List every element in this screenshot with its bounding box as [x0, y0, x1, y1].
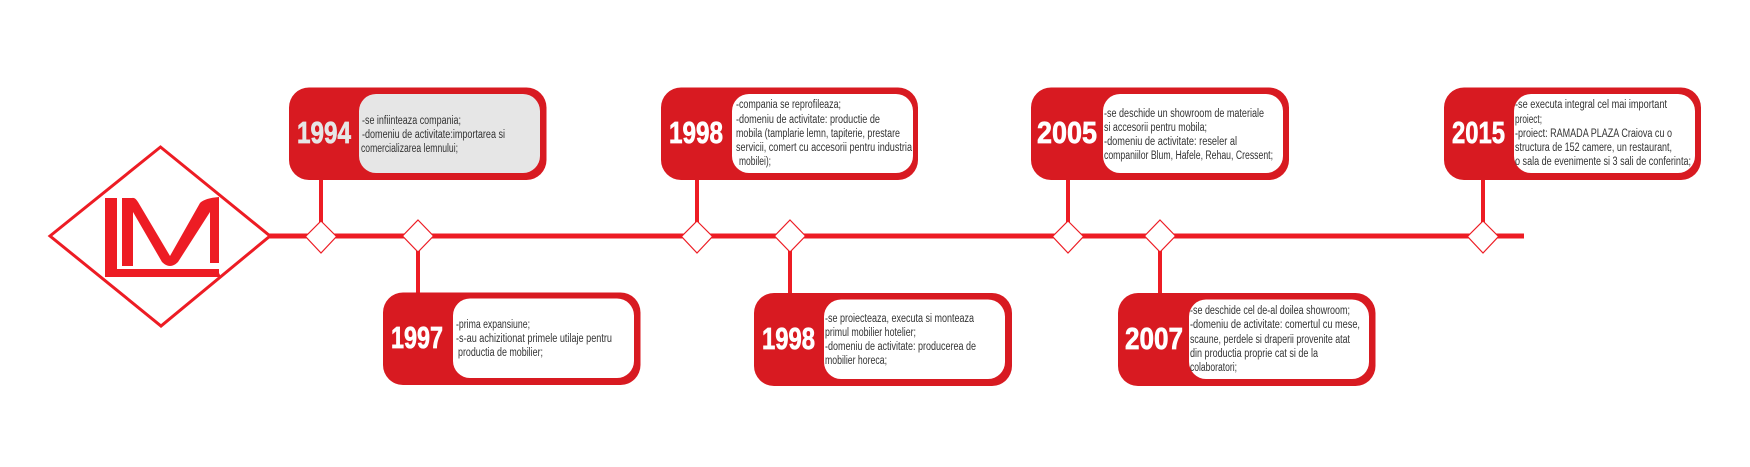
panel: 2015 [1444, 88, 1701, 180]
connector 1994 [319, 180, 323, 222]
marker 2007 [1144, 220, 1176, 252]
panel: 1998 top: mobilei); [739, 156, 771, 168]
marker 2005 [1052, 221, 1084, 253]
panel: 1997 [383, 292, 640, 385]
marker 1998 top [682, 221, 712, 253]
panel: 1998 bottom: primul mobilier hotelier; [825, 327, 916, 339]
marker 1997 [402, 220, 434, 252]
logo: LM in diamond [50, 147, 270, 326]
panel: 1994: comercializarea lemnului; [361, 143, 458, 155]
panel: 1997: -prima expansiune; [456, 319, 530, 331]
panel: 1997: -s-au achizitionat primele utilaje pentru [456, 333, 612, 345]
panel: 1998 bottom: mobilier horeca; [825, 355, 887, 367]
panel: 1998 bottom: 1998 [762, 321, 815, 356]
panel: 2005: 2005 [1037, 115, 1097, 150]
panel: 1997: productia de mobilier; [458, 347, 543, 359]
panel: 2007: 2007 [1125, 321, 1183, 356]
connector 2005 [1066, 180, 1070, 222]
panel: 2007: colaboratori; [1190, 362, 1237, 374]
panel: 1998 top: 1998 [669, 115, 723, 150]
panel: 1998 top: -compania se reprofileaza; [736, 99, 841, 111]
panel: 2005: -domeniu de activitate: reseler al [1104, 136, 1237, 148]
marker 2015 [1468, 221, 1498, 253]
panel: 2007: -se deschide cel de-al doilea showroom; [1190, 305, 1350, 317]
panel: 1994 [289, 88, 546, 180]
panel: 1998 top: mobila (tamplarie lemn, tapiterie, prestare [736, 128, 900, 140]
connector 1998 top [695, 180, 699, 222]
connector 1998 bottom [788, 251, 792, 293]
panel: 1998 top: servicii, comert cu accesorii pentru industria [736, 142, 912, 154]
panel: 1998 bottom [754, 293, 1012, 386]
panel: 2005: companiilor Blum, Hafele, Rehau, Cressent; [1104, 150, 1273, 162]
panel: 2005: si accesorii pentru mobila; [1104, 122, 1207, 134]
panel: 2015: proiect; [1515, 114, 1542, 126]
panel: 2007: din productia proprie cat si de la [1190, 348, 1318, 360]
panel: 2007 [1118, 293, 1376, 386]
panel: 2007: scaune, perdele si draperii provenite atat [1190, 334, 1351, 346]
panel: 2015: 2015 [1452, 115, 1505, 150]
marker 1998 bottom [774, 220, 806, 252]
connector 2015 [1481, 180, 1485, 222]
connector 2007 [1158, 251, 1162, 293]
panel: 1994: -se infiinteaza compania; [362, 115, 461, 127]
panel: 1998 top: -domeniu de activitate: productie de [736, 114, 880, 126]
timeline axis [268, 234, 1524, 238]
panel: 2015: o sala de evenimente si 3 sali de conferinta; [1515, 156, 1691, 168]
panel: 2015: -proiect: RAMADA PLAZA Craiova cu o [1515, 128, 1672, 140]
marker 1994 [306, 221, 336, 253]
panel: 2005: -se deschide un showroom de materiale [1104, 108, 1264, 120]
panel: 2015: structura de 152 camere, un restaurant, [1515, 142, 1672, 154]
panel: 1998 bottom: -domeniu de activitate: producerea de [825, 341, 976, 353]
panel: 2005 [1031, 88, 1289, 180]
panel: 2015: -se executa integral cel mai important [1515, 99, 1668, 111]
panel: 1994: 1994 [297, 115, 352, 150]
panel: 1997: 1997 [391, 320, 443, 355]
panel: 1998 bottom: -se proiecteaza, executa si monteaza [825, 313, 974, 325]
connector 1997 [416, 251, 420, 293]
panel: 1994: -domeniu de activitate:importarea si [362, 129, 505, 141]
panel: 2007: -domeniu de activitate: comertul cu mese, [1190, 319, 1360, 331]
panel: 1998 top [661, 88, 918, 180]
